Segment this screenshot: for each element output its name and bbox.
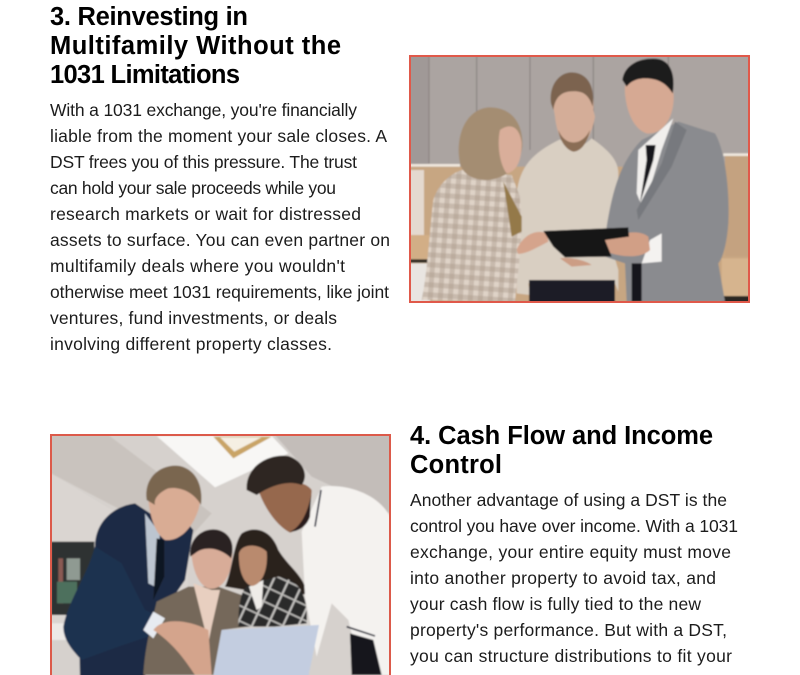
text block: section 3 body: With a 1031 exchange, you're financially — [50, 100, 357, 120]
man in navy suit body — [78, 503, 193, 675]
right man — [605, 122, 729, 302]
text block: section 4 body: your cash flow is fully tied to the new — [410, 594, 701, 614]
text block: section 3 body: assets to surface. You can even partner on — [50, 230, 390, 250]
photo: four colleagues around a laptop — [45, 430, 395, 675]
photo: three colleagues reviewing a tablet — [405, 50, 755, 310]
text block: section 3 body — [50, 100, 390, 354]
text block: section 4 body: exchange, your entire equity must move — [410, 542, 731, 562]
heading: section 4: Control — [410, 451, 502, 479]
heading: section 3: Multifamily Without the — [50, 32, 341, 60]
text block: section 3 body: can hold your sale proceeds while you — [50, 178, 336, 198]
woman with glasses — [143, 587, 248, 675]
text block: section 3 body: otherwise meet 1031 requirements, like joint — [50, 282, 389, 302]
text block: section 3 body: DST frees you of this pressure. The trust — [50, 152, 357, 172]
photo frame — [410, 56, 749, 302]
text block: section 4 body: you can structure distributions to fit your — [410, 646, 732, 666]
text block: section 4 body — [410, 490, 738, 666]
text block: section 4 body: property's performance. But with a DST, — [410, 620, 727, 640]
heading: section 3: 3. Reinvesting in — [50, 3, 248, 31]
panel: section 4 cash flow and income control — [45, 422, 738, 675]
text block: section 3 body: ventures, fund investments, or deals — [50, 308, 337, 328]
man in white sweater — [302, 486, 390, 675]
heading: section 4: 4. Cash Flow and Income — [410, 422, 713, 450]
text block: section 4 body: Another advantage of using a DST is the — [410, 490, 727, 510]
text block: section 4 body: into another property to avoid tax, and — [410, 568, 716, 588]
middle man — [517, 138, 618, 295]
text block: section 4 body: control you have over income. With a 1031 — [410, 516, 738, 536]
woman — [422, 170, 522, 302]
woman with long hair — [225, 529, 307, 603]
panel: section 3 reinvesting in multifamily — [50, 3, 755, 354]
tablet — [543, 227, 629, 257]
heading: section 4 — [410, 422, 713, 479]
laptop — [213, 625, 319, 675]
photo frame — [51, 435, 390, 675]
monitor — [51, 542, 94, 615]
text block: section 3 body: multifamily deals where you wouldn't — [50, 256, 345, 276]
navy suit arm and hand — [62, 548, 150, 659]
text block: section 3 body: liable from the moment your sale closes. A — [50, 126, 387, 146]
text block: section 3 body: involving different property classes. — [50, 334, 332, 354]
text block: section 3 body: research markets or wait for distressed — [50, 204, 361, 224]
heading: section 3 — [50, 3, 341, 89]
heading: section 3: 1031 Limitations — [50, 61, 240, 89]
